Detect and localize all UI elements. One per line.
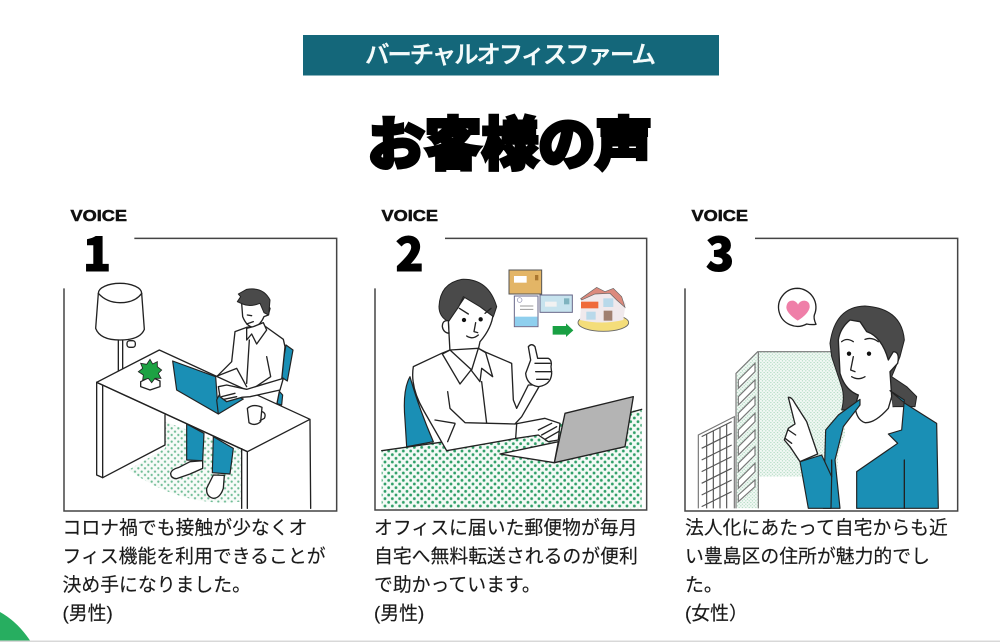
text: voice 1: (男性) bbox=[62, 602, 113, 624]
text: voice 1: フィス機能を利用できることが bbox=[62, 546, 326, 566]
panel: voice 1 bbox=[62, 208, 337, 624]
number 2: 2 bbox=[395, 219, 424, 285]
text: voice 3: (女性） bbox=[685, 602, 748, 624]
bottom edge bbox=[0, 640, 1000, 642]
voice 1 label: VOICE bbox=[70, 208, 127, 225]
illustration: man working at desk bbox=[64, 238, 337, 511]
text: voice 1: 決め手になりました。 bbox=[62, 574, 251, 595]
text: voice 2 bbox=[374, 517, 638, 624]
text: voice 1 bbox=[62, 517, 326, 624]
text: voice 2: (男性) bbox=[374, 602, 424, 624]
text: voice 3: 法人化にあたって自宅からも近 bbox=[685, 517, 948, 538]
illustration: man with thumbs up and mail bbox=[375, 238, 647, 510]
text: voice 1: コロナ禍でも接触が少なくオ bbox=[62, 517, 307, 538]
voice 3 label: VOICE bbox=[692, 208, 748, 225]
text: voice 2: で助かっています。 bbox=[374, 574, 541, 595]
panel: voice 2 bbox=[374, 208, 647, 624]
corner decoration: green arc bbox=[0, 612, 31, 642]
header band: バーチャルオフィスファーム bbox=[365, 42, 656, 69]
text: voice 3: い豊島区の住所が魅力的でし bbox=[685, 546, 930, 566]
header band bbox=[303, 35, 719, 76]
text: voice 3 bbox=[685, 517, 948, 624]
voice 2 label: VOICE bbox=[382, 208, 438, 225]
panel: voice 3 bbox=[685, 208, 958, 624]
text: voice 3: た。 bbox=[685, 574, 723, 595]
number 1: 1 bbox=[83, 219, 111, 285]
text: voice 2: オフィスに届いた郵便物が毎月 bbox=[374, 517, 637, 538]
text: voice 2: 自宅へ無料転送されるのが便利 bbox=[374, 546, 638, 566]
title: お客様の声 bbox=[368, 114, 652, 178]
illustration: woman with office building bbox=[685, 238, 958, 511]
number 3: 3 bbox=[706, 219, 734, 285]
